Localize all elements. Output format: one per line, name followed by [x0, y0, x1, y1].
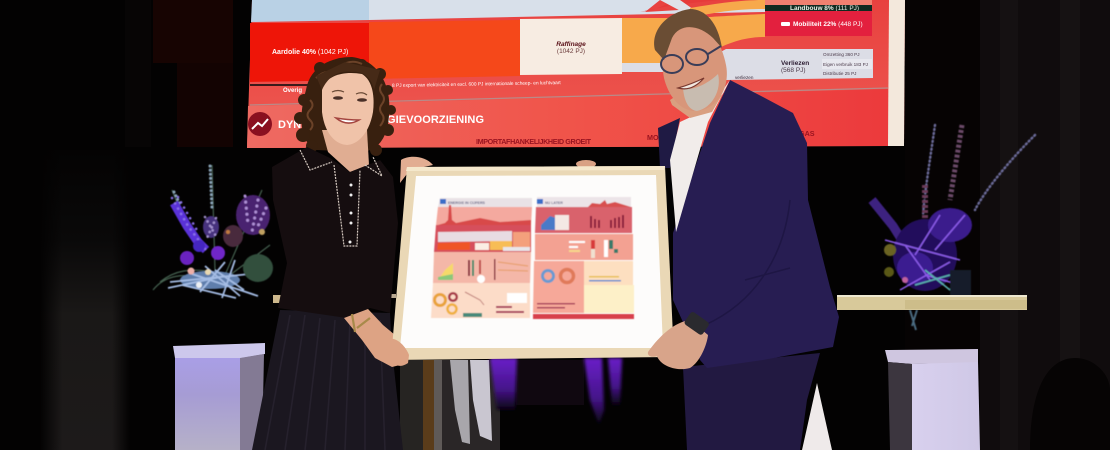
woman's lower hand: [385, 339, 409, 366]
subheading import: IMPORTAFHANKELIJKHEID GROEIT: [476, 137, 592, 146]
sankey flows: [622, 0, 765, 72]
verliezen box: Verliezen: [781, 60, 809, 67]
overig note: [250, 80, 561, 94]
jacket sleeve line: [705, 200, 790, 325]
bracelet: [352, 314, 370, 332]
subheading partial: MO: [647, 133, 659, 142]
easel and curtain below frame: [400, 358, 622, 450]
trousers: [683, 353, 820, 450]
white screen edge: [888, 0, 905, 146]
neck: [670, 80, 722, 118]
wooden frame: [391, 166, 674, 360]
right flowers: [872, 125, 1035, 330]
left poster: ENERGIE IN CIJFERS: [448, 201, 486, 205]
right table: [837, 295, 1027, 310]
man: [576, 9, 839, 450]
framed poster: [391, 166, 674, 360]
projection screen: [247, 0, 905, 148]
landbouw bar: Landbouw 8% (111 PJ): [790, 5, 859, 12]
raffinage box: Raffinage: [556, 41, 586, 48]
upper hand: [400, 157, 433, 183]
head: [660, 24, 727, 111]
verliezen box: [726, 49, 873, 80]
collar trim: [300, 150, 382, 176]
lower screen panel: [247, 89, 888, 148]
upper finger: [576, 160, 596, 168]
eyes: [332, 90, 367, 102]
face: [322, 73, 374, 145]
right pedestal: [885, 349, 980, 450]
hair back: [294, 57, 396, 156]
glasses: [661, 46, 721, 73]
beard: [683, 74, 719, 111]
skirt: [252, 310, 403, 450]
mobiliteit box: Mobiliteit 22% (448 PJ): [793, 21, 863, 28]
right poster: NU LATER: [545, 201, 563, 205]
overig note: 8 PJ export van elektriciteit en excl. 600 PJ internationale scheep- en luchtvaart: [392, 80, 561, 89]
white mat: [400, 175, 663, 348]
landbouw bar: [765, 0, 872, 12]
left flowers: [153, 165, 273, 298]
left poster: [431, 198, 532, 318]
suit jacket: [673, 80, 839, 368]
aardolie block: Aardolie 40% (1042 PJ): [272, 49, 348, 56]
smile: [678, 78, 704, 89]
raffinage box: [520, 18, 622, 75]
purple curtain light: [490, 358, 622, 425]
placket: [334, 165, 360, 246]
white object behind man: [802, 383, 832, 450]
jacket left side: [658, 118, 680, 168]
black top: [272, 147, 398, 318]
subheading gas: GAS: [799, 129, 815, 138]
hair: [654, 9, 722, 60]
hair curls highlights: [308, 62, 384, 130]
aardolie block: [250, 23, 369, 82]
woman: [252, 57, 433, 450]
fringe: [316, 62, 380, 90]
right poster: [533, 197, 634, 319]
verliezen box: verliezen: [735, 75, 754, 80]
forearm and hand: [344, 309, 408, 367]
verliezen box: Eigen verbruik 183 PJ: [823, 62, 868, 67]
raffinage box: (1042 PJ): [557, 48, 585, 55]
left pedestal: [173, 343, 265, 450]
mobiliteit box: [765, 11, 872, 36]
energy band top: [251, 0, 369, 22]
oil flow: [369, 20, 520, 79]
man's hand and watch: [648, 311, 710, 369]
divider: [250, 88, 888, 105]
verliezen box: (568 PJ): [781, 67, 806, 74]
section heading: DYN: [278, 119, 301, 131]
icon: trend arrow: [248, 112, 272, 136]
shirt: [670, 80, 730, 232]
neck: [322, 130, 369, 172]
smile: [336, 118, 359, 123]
overig note: Overig: [283, 88, 302, 94]
verliezen box: Distributie 25 PJ: [823, 71, 856, 76]
verliezen box: Omzetting 360 PJ: [823, 52, 860, 57]
left table: [273, 294, 396, 303]
lower screen panel: RGIEVOORZIENING: [379, 114, 484, 126]
